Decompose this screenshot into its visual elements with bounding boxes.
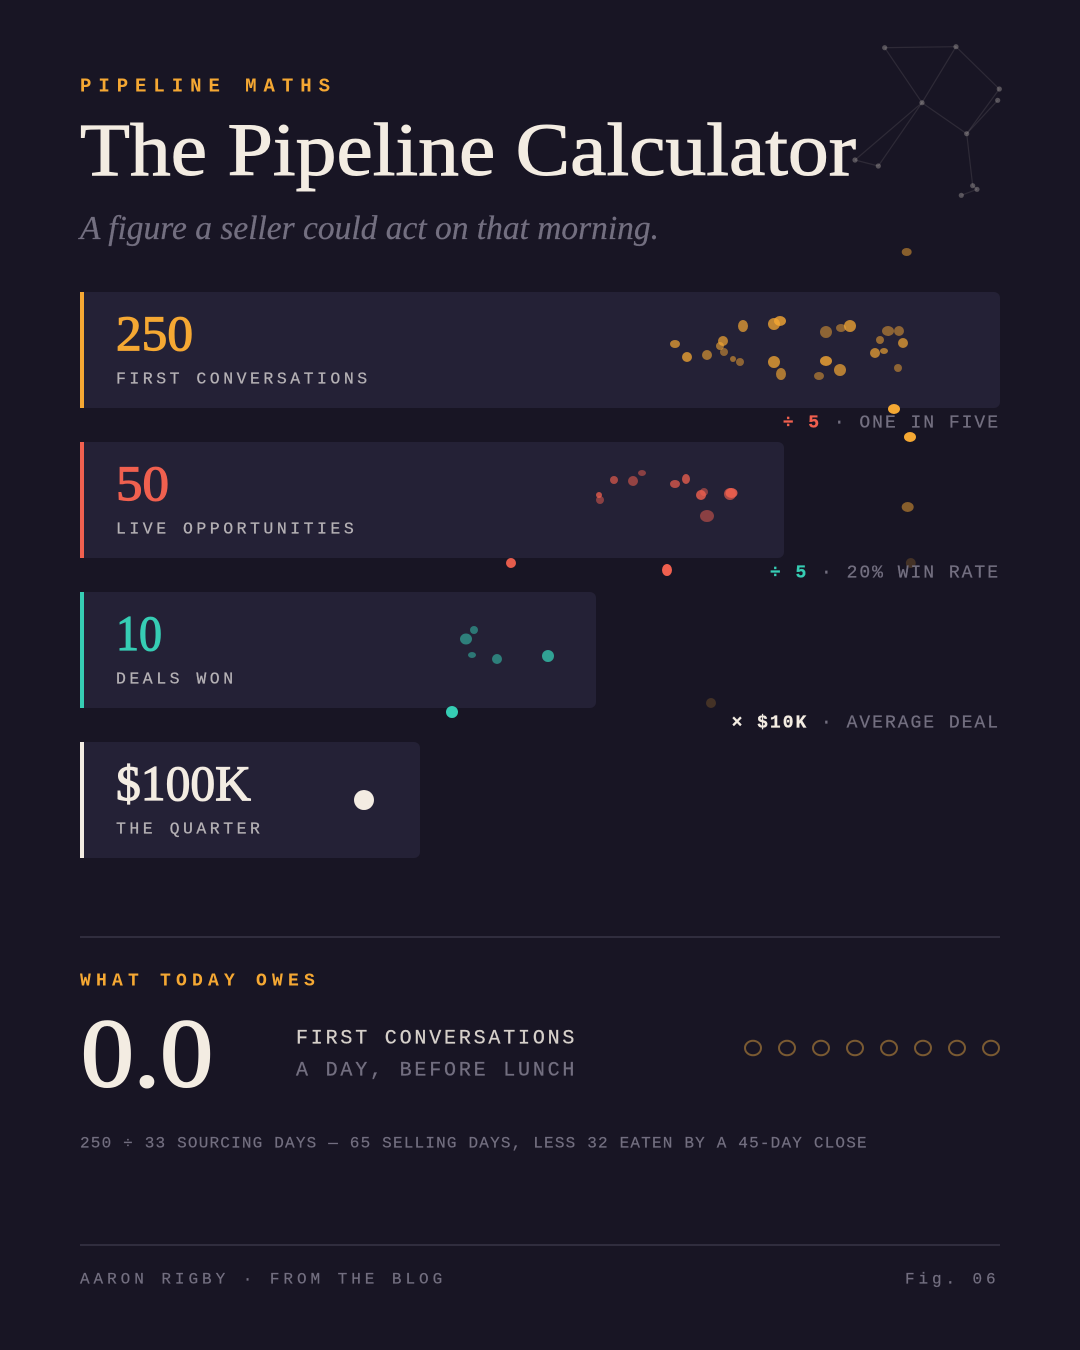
big figure: 0.0: 0.0 (81, 1000, 213, 1107)
row of empty rings (745, 1041, 999, 1055)
label: first conversations: FIRST CONVERSATIONS (116, 370, 371, 388)
text: first conversations a day (296, 1028, 577, 1082)
calculation note: 250 ÷ 33 SOURCING DAYS — 65 SELLING DAYS, LESS 32 EATEN BY A 45-DAY CLOSE (80, 1134, 868, 1152)
panel: 50 live opportunities (80, 442, 784, 558)
label: the quarter: THE QUARTER (116, 820, 263, 838)
eyebrow: PIPELINE MATHS (80, 76, 337, 98)
figure: 250: 250 (116, 305, 193, 361)
footer: figure number: Fig. 06 (905, 1270, 1000, 1288)
footer: author: AARON RIGBY · FROM THE BLOG (80, 1270, 446, 1288)
annotation: divide by 5: ÷ 5 · ONE IN FIVE (783, 414, 1000, 434)
figure: 10: 10 (116, 605, 162, 661)
title: The Pipeline Calculator (80, 109, 856, 192)
label: deals won: DEALS WON (116, 670, 237, 688)
text: first conversations a day: FIRST CONVERSATIONS (296, 1028, 577, 1050)
heading: what today owes: WHAT TODAY OWES (80, 972, 320, 992)
dots: amber scatter (670, 248, 916, 568)
panel: $100K the quarter (80, 742, 420, 858)
dots: teal scatter (446, 626, 716, 718)
figure: $100K: $100K (116, 755, 251, 811)
panel: 250 first conversations (80, 292, 1000, 408)
constellation decoration (852, 44, 1002, 198)
dot: the quarter (354, 790, 374, 810)
figure: 50: 50 (116, 455, 169, 511)
dots: coral scatter (506, 470, 738, 576)
annotation: win rate: ÷ 5 · 20% WIN RATE (770, 564, 1000, 584)
annotation: average deal: × $10K · AVERAGE DEAL (732, 714, 1000, 734)
panel: 10 deals won (80, 592, 596, 708)
label: live opportunities: LIVE OPPORTUNITIES (116, 520, 357, 538)
subtitle: A figure a seller could act on that morning. (78, 210, 659, 247)
text: first conversations a day: A DAY, BEFORE LUNCH (296, 1060, 577, 1082)
